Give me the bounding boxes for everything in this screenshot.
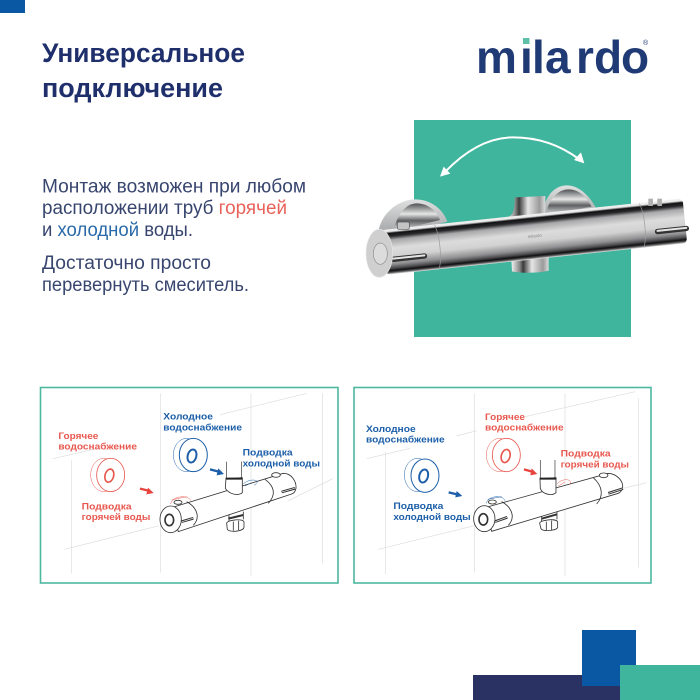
arrow: cold: [449, 491, 462, 497]
title: подключение: [42, 73, 223, 103]
image: chrome thermostatic mixer: [366, 185, 688, 277]
label: cold water supply: Холодное: [163, 412, 213, 422]
text block: description: [42, 176, 306, 296]
label: cold water supply: [163, 412, 242, 433]
tube body: milardo: [527, 233, 543, 239]
fixture: mixer line drawing: [160, 462, 296, 533]
text block: description: расположении труб горячей: [42, 198, 287, 219]
icon: cold water flange: [404, 458, 505, 503]
upper neck: [507, 196, 545, 223]
right wall flange: [543, 185, 596, 218]
label: cold water connection: холодной воды: [243, 458, 320, 468]
arrow: hot: [140, 488, 154, 494]
left wall flange: [378, 199, 447, 235]
label: cold water supply: водоснабжение: [366, 435, 445, 445]
label: hot water connection: [82, 501, 151, 522]
label: hot water connection: горячей воды: [82, 512, 151, 522]
label: cold water connection: [393, 501, 471, 522]
label: hot water connection: [561, 449, 629, 469]
label: hot water supply: водоснабжение: [485, 423, 564, 433]
label: cold water supply: [366, 424, 445, 445]
label: hot water supply: Горячее: [485, 412, 525, 422]
arrow: cold: [210, 468, 224, 475]
label: hot water connection: Подводка: [561, 449, 612, 459]
panel: green square behind mixer: [414, 120, 631, 337]
wall guide lines: [53, 393, 333, 576]
label: hot water supply: водоснабжение: [58, 441, 137, 451]
corner accent: bottom right blocks: [473, 630, 700, 700]
title: Универсальное: [42, 38, 245, 68]
panel: left diagram: [40, 388, 338, 583]
label: cold water connection: Подводка: [393, 501, 444, 511]
tube body: [381, 198, 688, 275]
label: hot water supply: Горячее: [58, 431, 98, 441]
lower neck: [511, 253, 549, 273]
label: cold water connection: [243, 447, 320, 468]
label: hot water supply: [485, 412, 564, 433]
panel: right diagram: [354, 388, 651, 583]
title: [42, 38, 245, 103]
logo: milardo: ®: [643, 39, 649, 47]
arrow: hot: [524, 468, 537, 475]
logo: milardo: milardo: [476, 31, 649, 83]
label: hot water connection: Подводка: [82, 501, 133, 511]
text block: description: Монтаж возможен при любом: [42, 176, 306, 198]
corner accent: top left: [0, 0, 25, 13]
label: cold water connection: Подводка: [243, 447, 294, 457]
wall guide lines: [367, 392, 647, 576]
arrow: rotation arc: [440, 137, 584, 177]
icon: hot water flange: [91, 458, 191, 504]
end cap: [366, 229, 393, 277]
icon: hot water flange: [486, 438, 571, 486]
label: hot water supply: [58, 431, 137, 451]
text block: description: перевернуть смеситель.: [42, 275, 249, 296]
label: hot water connection: горячей воды: [561, 459, 629, 469]
top pegs: [397, 199, 662, 229]
label: cold water supply: Холодное: [366, 424, 416, 434]
text block: description: Достаточно просто: [42, 253, 211, 274]
label: cold water supply: водоснабжение: [163, 423, 242, 433]
fixture: mixer line drawing: [474, 460, 623, 532]
text block: description: и холодной воды.: [42, 220, 193, 241]
label: cold water connection: холодной воды: [393, 512, 471, 522]
icon: cold water flange: [173, 438, 257, 486]
